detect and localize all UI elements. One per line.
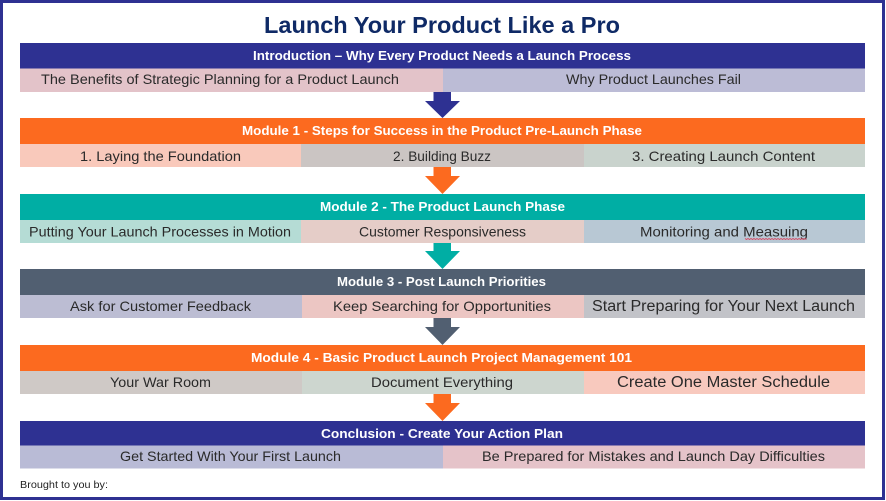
topic: launch processes in motion xyxy=(20,220,301,243)
heading: module 2 xyxy=(20,194,865,220)
topic: launch processes in motion: Putting Your Launch Processes in Motion xyxy=(29,224,291,240)
heading: introduction: Introduction – Why Every Product Needs a Launch Process xyxy=(253,48,631,63)
topic: monitoring and measuring: Monitoring and Measuing xyxy=(640,224,808,240)
topic: building buzz xyxy=(301,144,584,167)
topic: customer responsiveness xyxy=(301,220,584,243)
heading: module 3 xyxy=(20,269,865,295)
topic: launches fail xyxy=(443,68,865,92)
arrow: module 4 to conclusion xyxy=(425,394,460,421)
topic: master schedule: Create One Master Schedule xyxy=(617,374,830,391)
arrow: module 1 to module 2 xyxy=(425,167,460,194)
panel: conclusion xyxy=(20,421,865,468)
footer credit: Brought to you by: xyxy=(20,480,108,491)
heading: module 1: Module 1 - Steps for Success in the Product Pre-Launch Phase xyxy=(242,123,642,138)
topic: customer feedback xyxy=(20,295,302,318)
heading: introduction xyxy=(20,43,865,68)
topic: creating launch content xyxy=(584,144,865,167)
topic: mistakes and difficulties: Be Prepared for Mistakes and Launch Day Difficulties xyxy=(482,448,825,464)
heading: module 3: Module 3 - Post Launch Priorities xyxy=(337,274,546,289)
topic: next launch xyxy=(584,295,865,318)
topic: creating launch content: 3. Creating Launch Content xyxy=(632,148,815,164)
panel: introduction xyxy=(20,43,865,92)
heading: module 4 xyxy=(20,345,865,371)
topic: next launch: Start Preparing for Your Next Launch xyxy=(592,298,855,315)
topic: strategic planning xyxy=(20,68,443,92)
panel: module 2 xyxy=(20,194,865,243)
arrow: introduction to module 1 xyxy=(425,92,460,118)
topic: customer responsiveness: Customer Responsiveness xyxy=(359,224,526,240)
arrow: module 3 to module 4 xyxy=(425,318,460,345)
panel: module 4 xyxy=(20,345,865,394)
topic: first launch xyxy=(20,446,443,468)
panel: module 1 xyxy=(20,118,865,167)
topic: laying the foundation: 1. Laying the Foundation xyxy=(80,148,241,164)
heading: module 4: Module 4 - Basic Product Launch Project Management 101 xyxy=(251,350,632,365)
topic: launches fail: Why Product Launches Fail xyxy=(566,71,741,87)
topic: first launch: Get Started With Your First Launch xyxy=(120,448,341,464)
topic: war room: Your War Room xyxy=(110,374,211,390)
panel: module 3 xyxy=(20,269,865,318)
title: Launch Your Product Like a Pro xyxy=(264,12,620,38)
arrow: module 2 to module 3 xyxy=(425,243,460,269)
topic: customer feedback: Ask for Customer Feedback xyxy=(70,298,252,314)
topic: monitoring and measuring xyxy=(584,220,865,243)
topic: searching for opportunities: Keep Searching for Opportunities xyxy=(333,298,551,314)
topic: building buzz: 2. Building Buzz xyxy=(393,148,491,164)
topic: mistakes and difficulties xyxy=(443,446,865,468)
topic: strategic planning: The Benefits of Strategic Planning for a Product Launch xyxy=(41,71,399,87)
topic: master schedule xyxy=(584,371,865,394)
topic: document everything: Document Everything xyxy=(371,374,513,390)
heading: conclusion: Conclusion - Create Your Action Plan xyxy=(321,426,563,441)
topic: searching for opportunities xyxy=(302,295,584,318)
heading: module 1 xyxy=(20,118,865,144)
heading: module 2: Module 2 - The Product Launch Phase xyxy=(320,199,565,214)
topic: document everything xyxy=(302,371,584,394)
topic: war room xyxy=(20,371,302,394)
heading: conclusion xyxy=(20,421,865,446)
topic: laying the foundation xyxy=(20,144,301,167)
